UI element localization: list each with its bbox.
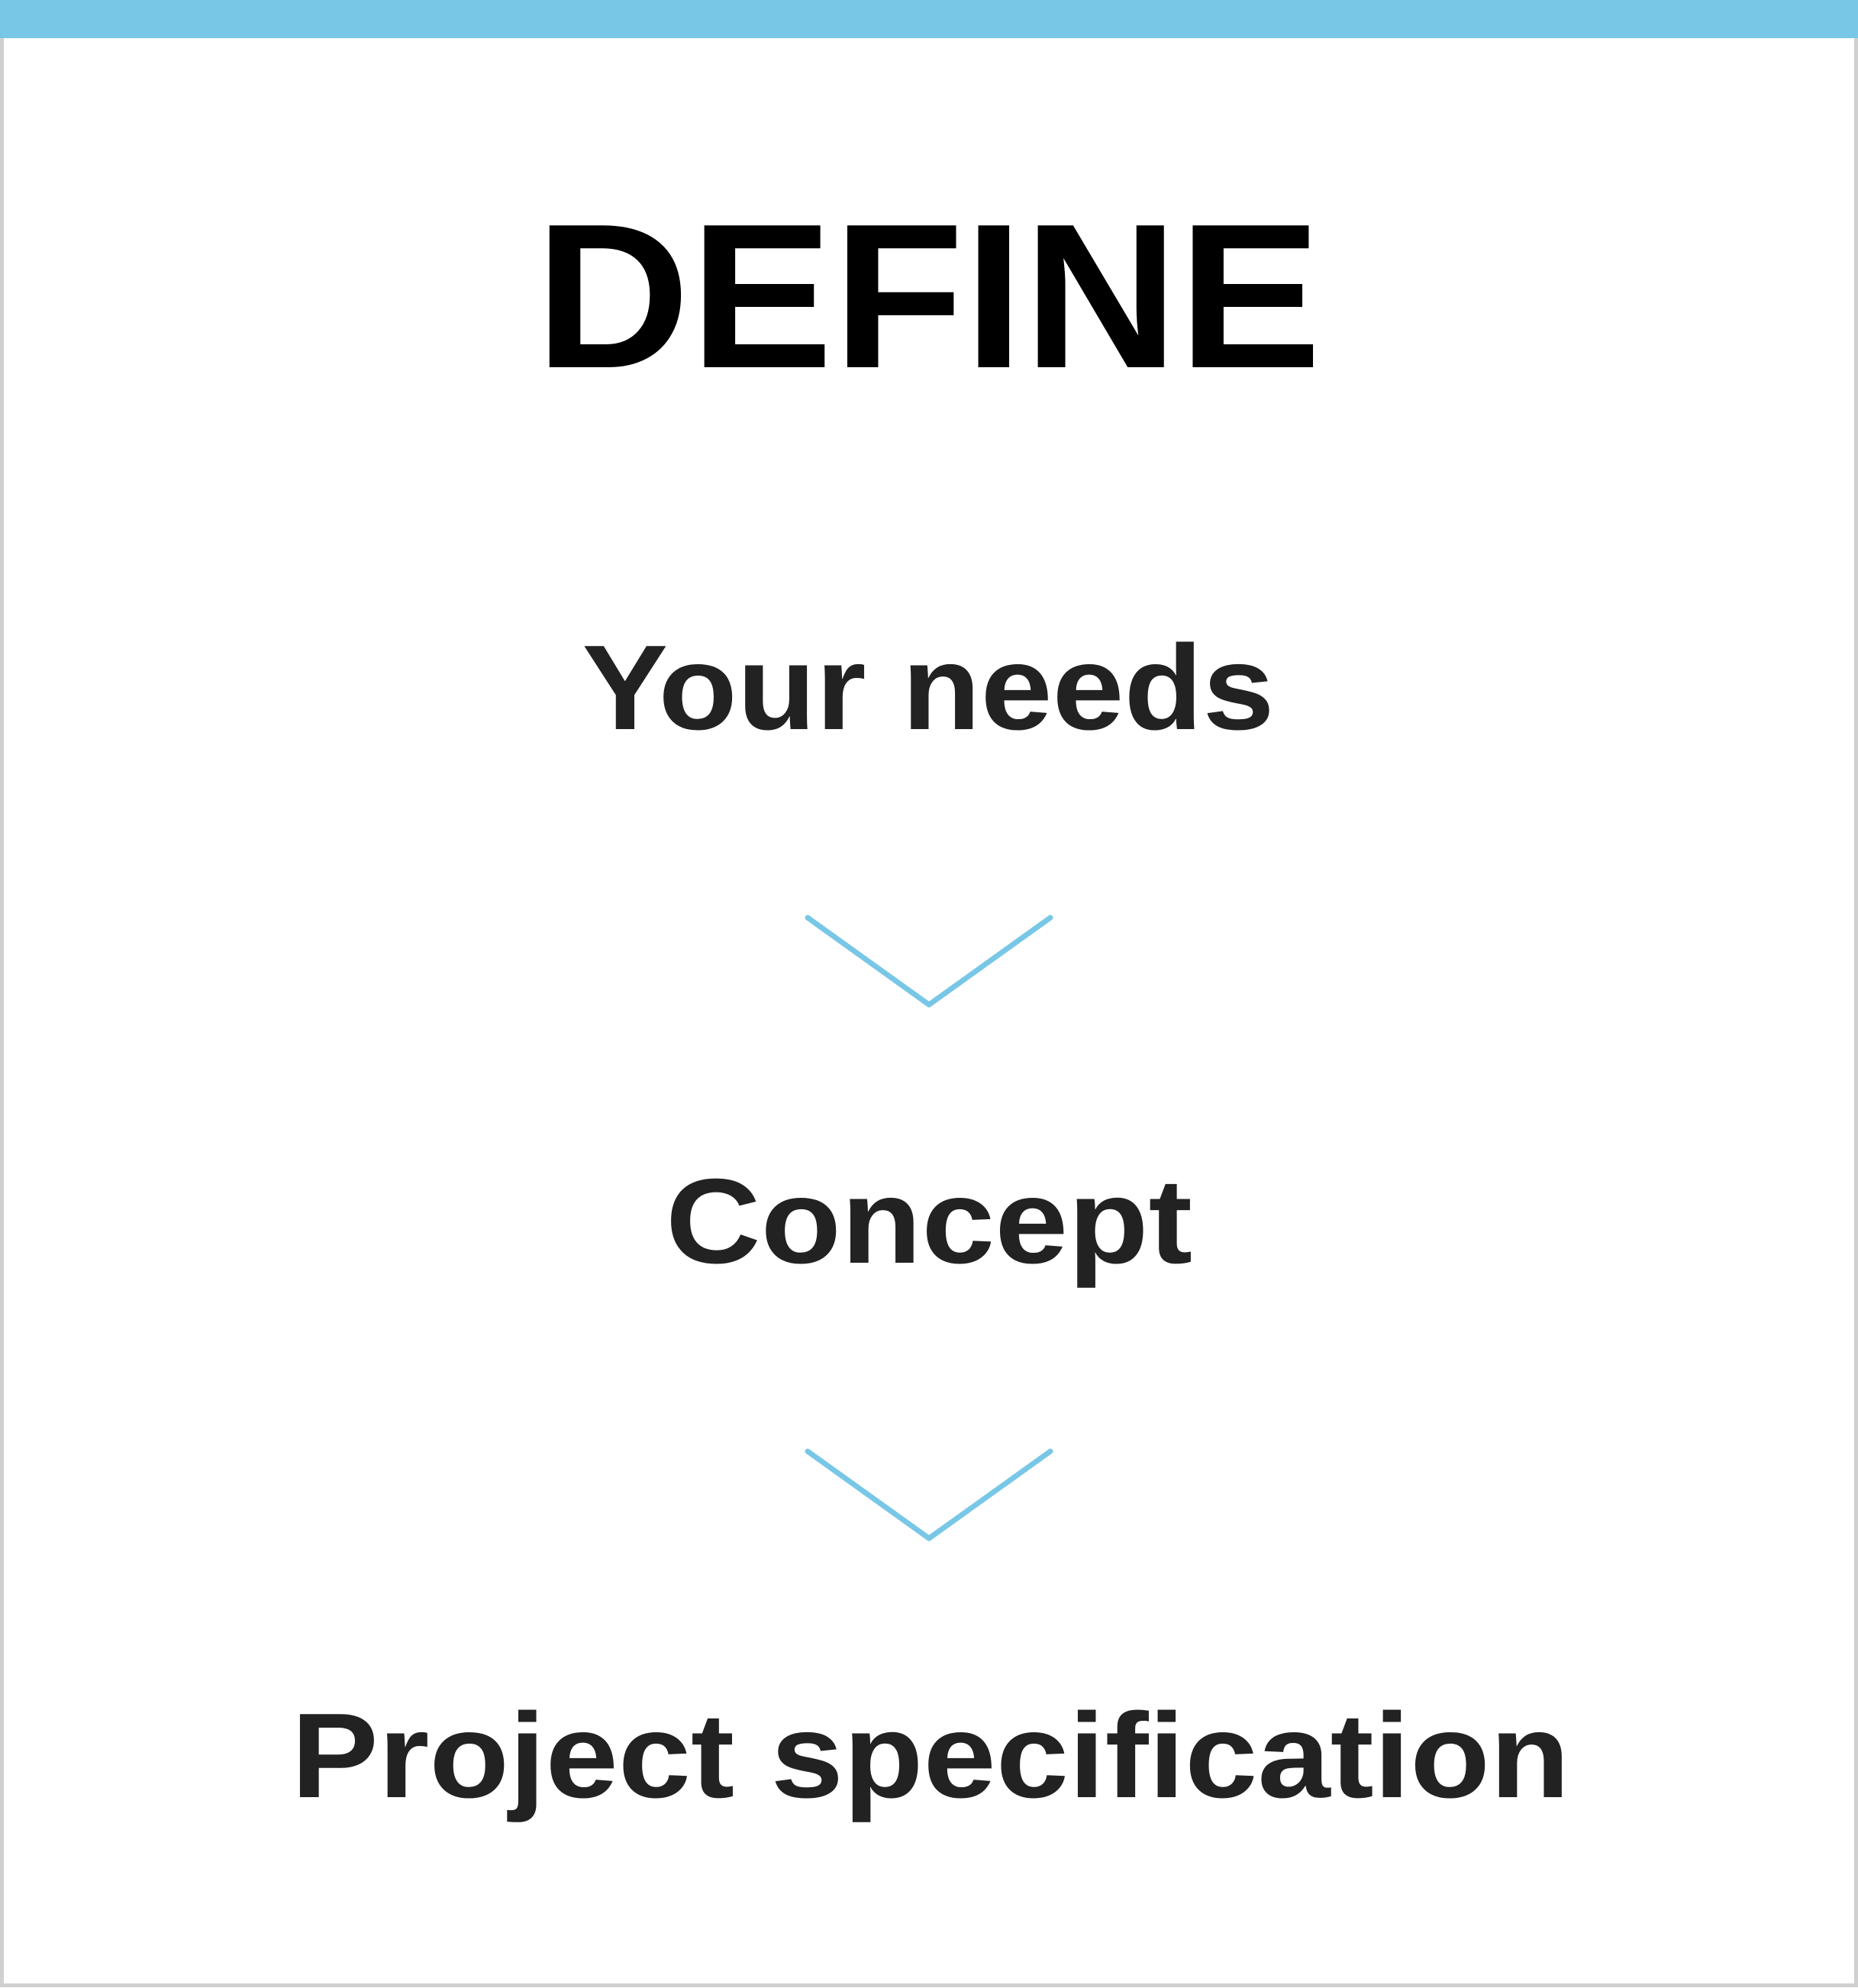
step: Project specification: Project specification [292,1689,1569,1823]
title: DEFINE [535,182,1321,411]
step: Concept: Concept [666,1154,1192,1289]
top accent bar [0,0,1858,38]
arrow: chevron 2 [808,1451,1050,1538]
step: Your needs: Your needs [582,621,1275,755]
arrow: chevron 1 [808,918,1050,1005]
